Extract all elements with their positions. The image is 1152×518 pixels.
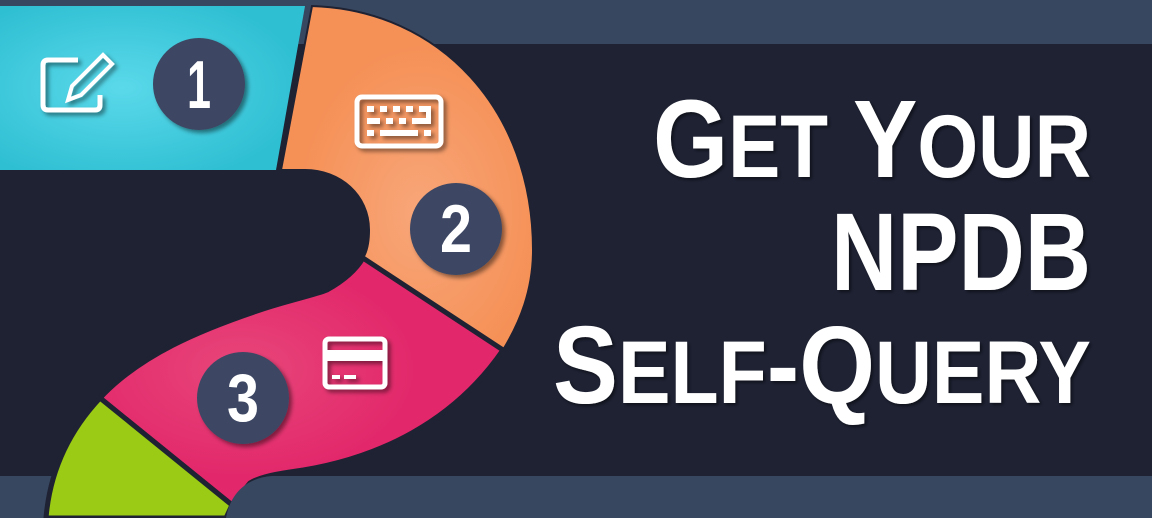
panel: step 2 orange [281, 6, 533, 350]
step number 2 [410, 183, 502, 275]
title: SELF-QUERY [553, 304, 1091, 427]
step number 3 [197, 352, 289, 444]
step number 1 [153, 38, 245, 130]
icon: edit pencil [43, 55, 112, 110]
panel: step 1 cyan [0, 6, 305, 170]
title [553, 78, 1091, 427]
title: NPDB [831, 191, 1091, 314]
icon: credit card [325, 339, 385, 387]
panel: step 3 pink [100, 258, 503, 505]
title: GET YOUR [653, 78, 1091, 201]
step number 1: 1 [187, 47, 211, 123]
step number 3: 3 [227, 360, 259, 436]
icon: keyboard [357, 97, 441, 146]
panel: step 4 green [46, 398, 232, 518]
step number 2: 2 [440, 191, 472, 267]
